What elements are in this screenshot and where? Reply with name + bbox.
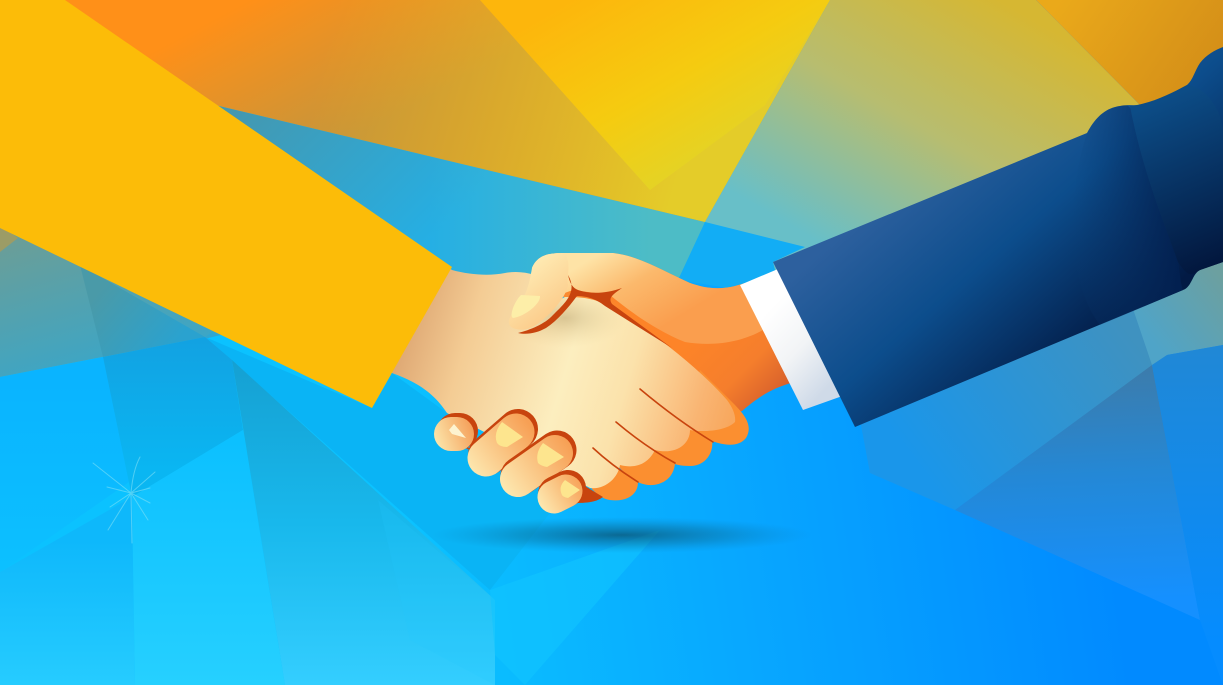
sleeve upper fold bbox=[1130, 85, 1223, 274]
finger 4 bbox=[554, 480, 580, 498]
finger 3 bbox=[518, 443, 564, 479]
pale front hand bbox=[380, 262, 735, 488]
shadow under thumb bbox=[503, 288, 627, 348]
right dark blue sleeve bbox=[773, 47, 1223, 427]
finger creases bbox=[593, 389, 713, 482]
upper hand highlight bbox=[532, 253, 768, 344]
finger 2 bbox=[486, 422, 523, 458]
sleeve fold bbox=[1073, 105, 1183, 325]
orange back hand bbox=[532, 253, 795, 420]
orange fingertips bbox=[575, 370, 749, 500]
finger 1 bbox=[449, 424, 466, 438]
icon: sparkle bbox=[93, 457, 155, 543]
thumb bbox=[509, 253, 569, 330]
thumbnail bbox=[512, 295, 540, 318]
left yellow sleeve bbox=[0, 0, 452, 408]
gripping fingers bbox=[449, 422, 603, 503]
white shirt cuff bbox=[740, 266, 848, 410]
ground shadow bbox=[432, 517, 812, 553]
crease under thumb bbox=[518, 275, 672, 348]
